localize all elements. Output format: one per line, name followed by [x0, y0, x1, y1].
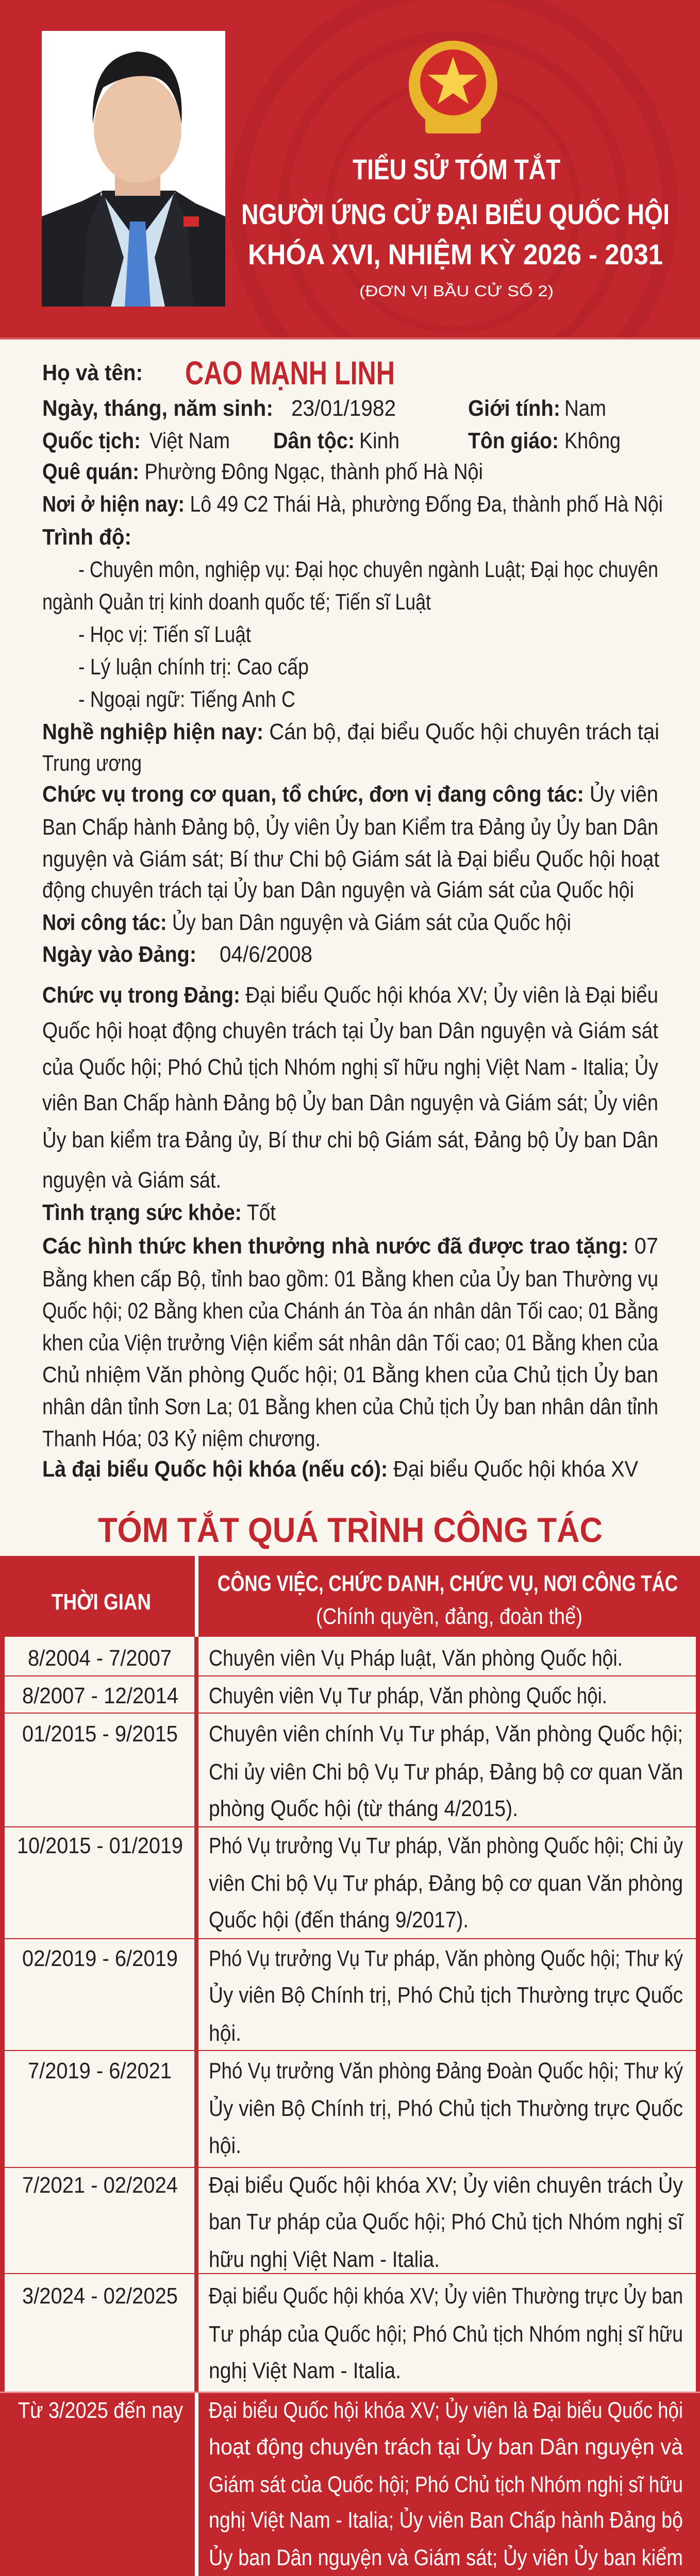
personal info block: Kinh — [359, 428, 399, 453]
row: 02/2019 - 6/2019: hội. — [209, 2021, 241, 2046]
title: TIỂU SỬ TÓM TẮT — [353, 153, 560, 185]
row: 8/2004 - 7/2007: Chuyên viên Vụ Pháp luật, Văn phòng Quốc hội. — [209, 1646, 623, 1671]
personal info block: Thanh Hóa; 03 Kỷ niệm chương. — [42, 1426, 321, 1451]
icon: national emblem — [409, 41, 497, 133]
personal info block: - Học vị: Tiến sĩ Luật — [78, 622, 251, 647]
row: 8/2004 - 7/2007 — [28, 1646, 623, 1671]
personal info block: Ngày, tháng, năm sinh: — [42, 396, 273, 421]
personal info block: Quê quán: Phường Đông Ngạc, thành phố Hà Nội — [42, 459, 483, 484]
personal info block: Không — [564, 428, 621, 453]
personal info block: Là đại biểu Quốc hội khóa (nếu có): Đại biểu Quốc hội khóa XV — [42, 1456, 639, 1482]
table header — [0, 1556, 700, 1637]
row: 3/2024 - 02/2025: nghị Việt Nam - Italia. — [209, 2358, 401, 2383]
personal info block: Tình trạng sức khỏe: Tốt — [42, 1200, 276, 1225]
row: 7/2021 - 02/2024: 7/2021 - 02/2024 — [22, 2173, 178, 2198]
row: 7/2021 - 02/2024 — [22, 2172, 684, 2272]
title — [241, 153, 670, 270]
row: 7/2019 - 6/2021: 7/2019 - 6/2021 — [28, 2058, 172, 2083]
table header: THỜI GIAN — [52, 1589, 151, 1615]
personal info block: Ngày vào Đảng: — [42, 942, 196, 967]
personal info block: Các hình thức khen thưởng nhà nước đã được trao tặng: 07 — [42, 1233, 658, 1259]
row: 01/2015 - 9/2015: phòng Quốc hội (từ tháng 4/2015). — [209, 1796, 518, 1821]
row: 8/2007 - 12/2014: Chuyên viên Vụ Tư pháp, Văn phòng Quốc hội. — [209, 1683, 607, 1708]
row: current (highlighted): Từ 3/2025 đến nay — [18, 2398, 183, 2423]
personal info block: Họ và tên: — [42, 360, 143, 385]
personal info block: Tôn giáo: — [468, 428, 559, 453]
table: work history — [0, 1556, 700, 2576]
personal info block: Trình độ: — [42, 524, 131, 550]
row: 02/2019 - 6/2019: 02/2019 - 6/2019 — [22, 1946, 178, 1971]
personal info block: - Ngoại ngữ: Tiếng Anh C — [78, 687, 295, 712]
personal info block: nguyện và Giám sát. — [42, 1167, 221, 1193]
row: 7/2019 - 6/2021 — [28, 2058, 683, 2158]
row: 8/2004 - 7/2007: 8/2004 - 7/2007 — [28, 1646, 172, 1671]
personal info block: Trung ương — [42, 751, 142, 776]
row: 3/2024 - 02/2025 — [22, 2282, 683, 2383]
personal info block: Dân tộc: — [273, 428, 355, 453]
personal info block: ngành Quản trị kinh doanh quốc tế; Tiến sĩ Luật — [42, 589, 431, 615]
header banner — [0, 0, 700, 340]
table header: (Chính quyền, đảng, đoàn thể) — [316, 1604, 582, 1629]
row: 10/2015 - 01/2019 — [17, 1833, 683, 1933]
row: 8/2007 - 12/2014 — [22, 1683, 607, 1708]
personal info block: Việt Nam — [149, 428, 230, 453]
title: KHÓA XVI, NHIỆM KỲ 2026 - 2031 — [248, 238, 663, 270]
row: 10/2015 - 01/2019: Quốc hội (đến tháng 9/2017). — [209, 1907, 469, 1933]
personal info block: Nam — [564, 396, 606, 421]
row: 7/2019 - 6/2021: hội. — [209, 2133, 241, 2158]
subtitle: (ĐƠN VỊ BẦU CỬ SỐ 2) — [359, 282, 554, 300]
personal info block: 23/01/1982 — [291, 396, 396, 421]
candidate name: CAO MẠNH LINH — [185, 354, 395, 392]
row: 02/2019 - 6/2019 — [22, 1946, 683, 2046]
section heading: work history: TÓM TẮT QUÁ TRÌNH CÔNG TÁC — [98, 1510, 603, 1550]
row: 01/2015 - 9/2015 — [22, 1721, 683, 1821]
row: 01/2015 - 9/2015: 01/2015 - 9/2015 — [22, 1721, 178, 1747]
personal info block: Quốc tịch: — [42, 428, 141, 453]
personal info block: 04/6/2008 — [220, 942, 312, 967]
row: 3/2024 - 02/2025: 3/2024 - 02/2025 — [22, 2283, 178, 2309]
personal info block: Giới tính: — [468, 396, 560, 421]
row: current (highlighted): hoạt động chuyên trách tại Ủy ban Dân nguyện và — [209, 2433, 683, 2460]
row: 7/2021 - 02/2024: hữu nghị Việt Nam - Italia. — [209, 2247, 440, 2272]
personal info block — [42, 354, 663, 1482]
personal info block: Chức vụ trong Đảng: Đại biểu Quốc hội khóa XV; Ủy viên là Đại biểu — [42, 981, 658, 1008]
personal info block: Nghề nghiệp hiện nay: Cán bộ, đại biểu Quốc hội chuyên trách tại — [42, 719, 659, 744]
row: 8/2007 - 12/2014: 8/2007 - 12/2014 — [22, 1683, 178, 1708]
personal info block: - Lý luận chính trị: Cao cấp — [78, 654, 309, 680]
portrait photo — [42, 31, 225, 307]
row: current (highlighted) — [0, 2392, 700, 2576]
personal info block: Nơi công tác: Ủy ban Dân nguyện và Giám sát của Quốc hội — [42, 909, 571, 935]
row: 10/2015 - 01/2019: 10/2015 - 01/2019 — [17, 1833, 183, 1858]
personal info block: Chức vụ trong cơ quan, tổ chức, đơn vị đang công tác: Ủy viên — [42, 781, 658, 807]
